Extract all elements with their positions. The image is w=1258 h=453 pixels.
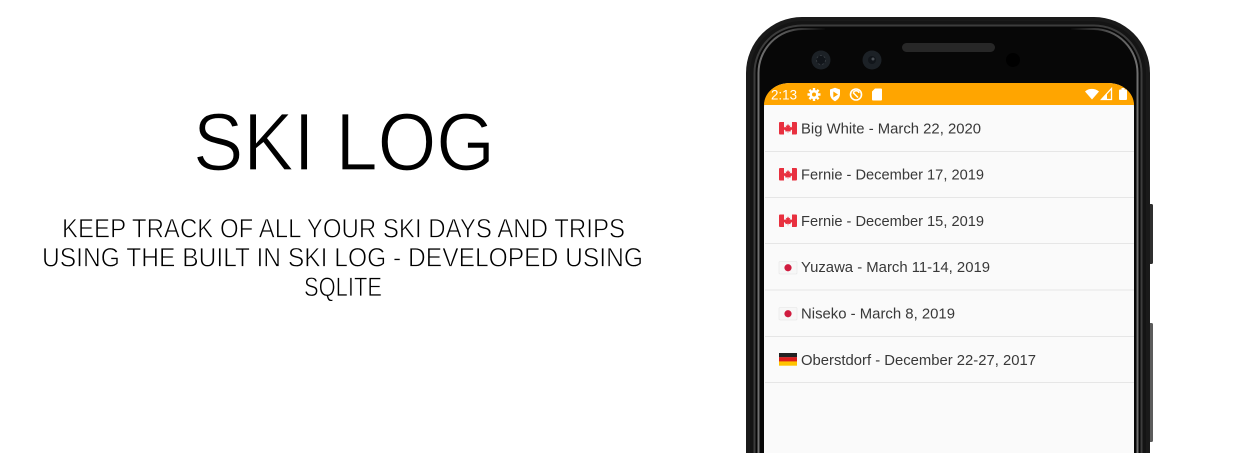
icon: cell signal	[1102, 88, 1112, 100]
front camera left	[812, 50, 830, 70]
screen background	[764, 83, 1134, 453]
list row: Oberstdorf	[765, 353, 1134, 383]
list row: Fernie 15	[765, 214, 1134, 244]
description text: KEEP TRACK OF ALL YOUR SKI DAYS AND TRIPS	[62, 214, 625, 244]
side buttons	[1147, 204, 1153, 442]
icon: sd card	[872, 88, 882, 100]
list row: Fernie 17: Fernie - December 17, 2019	[801, 168, 984, 184]
front camera right	[862, 50, 882, 70]
clock: 2:13	[771, 86, 797, 102]
speaker	[902, 43, 995, 52]
list row: Niseko	[765, 306, 1134, 337]
icon: battery	[1119, 88, 1127, 100]
list row: Big White	[765, 122, 1134, 152]
icon: circle sync	[850, 89, 862, 100]
list row: Big White: Big White - March 22, 2020	[801, 122, 981, 138]
phone body	[746, 17, 1150, 453]
list row: Yuzawa	[765, 260, 1134, 290]
title: SKI LOG	[193, 97, 495, 188]
icon: German flag	[779, 353, 797, 366]
list row: Fernie 15: Fernie - December 15, 2019	[801, 214, 984, 230]
icon: wifi	[1085, 89, 1099, 100]
list of ski days	[765, 122, 1134, 383]
list row: Yuzawa: Yuzawa - March 11-14, 2019	[801, 260, 990, 276]
description text	[42, 214, 643, 302]
description text: SQLITE	[304, 272, 382, 302]
icon: shield play	[830, 88, 840, 101]
description text: USING THE BUILT IN SKI LOG - DEVELOPED USING	[42, 242, 643, 272]
list row: Oberstdorf: Oberstdorf - December 22-27, 2017	[801, 353, 1036, 369]
phone mockup	[746, 17, 1153, 453]
list row: Niseko: Niseko - March 8, 2019	[801, 306, 955, 322]
list row: Fernie 17	[765, 168, 1134, 198]
sensor	[1006, 53, 1020, 67]
status bar	[764, 83, 1134, 105]
icon: settings gear	[808, 88, 820, 101]
